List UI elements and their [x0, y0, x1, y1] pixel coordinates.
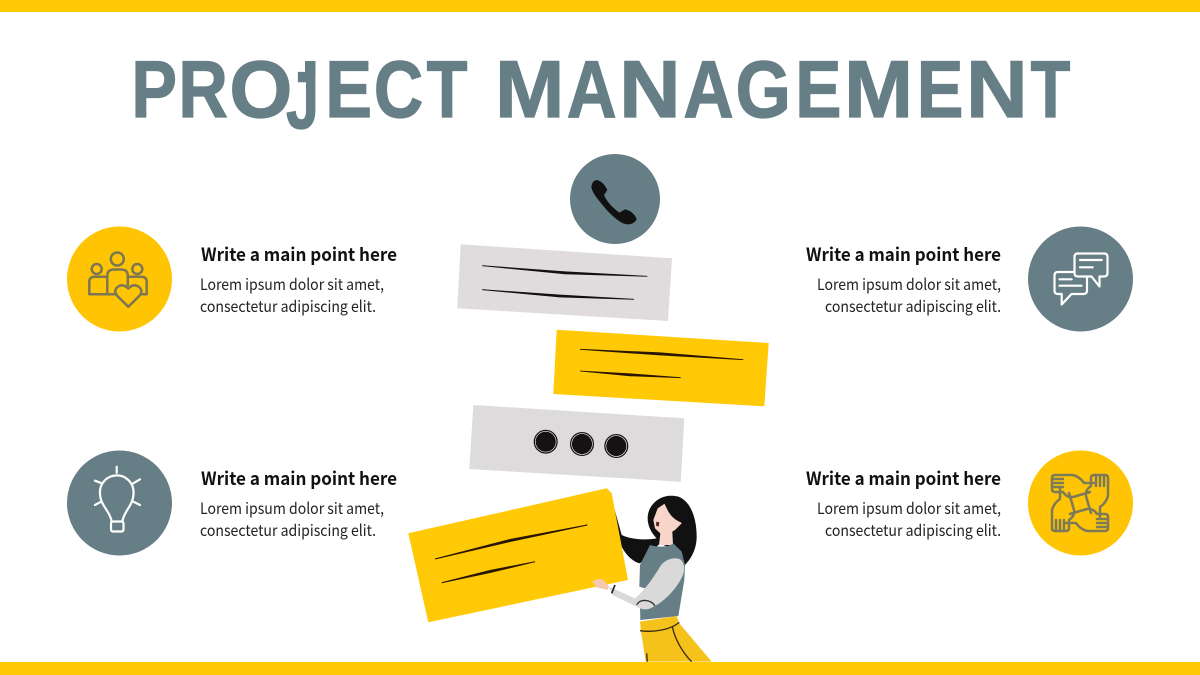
top accent bar — [0, 0, 1200, 12]
panel: top right point — [806, 226, 1133, 332]
illustration: woman holding yellow card — [408, 488, 712, 662]
woman figure — [609, 496, 712, 662]
title: J — [286, 56, 319, 146]
panel: top left point — [67, 226, 397, 332]
body text: Lorem ipsum dolor sit amet, — [200, 273, 384, 295]
body text — [817, 497, 1001, 541]
title: R — [178, 45, 228, 135]
bottom accent bar — [0, 662, 1200, 675]
card: yellow message with lines — [553, 330, 769, 406]
title: P — [131, 45, 177, 135]
title: T — [427, 45, 467, 135]
body text: consectetur adipiscing elit. — [825, 519, 1001, 541]
card: grey typing indicator — [469, 405, 684, 482]
panel: bottom left point — [67, 450, 397, 556]
icon: chat bubbles — [1028, 226, 1133, 332]
title: N — [619, 45, 681, 135]
icon: phone circle — [570, 154, 660, 244]
title: M — [495, 45, 564, 135]
title: O — [229, 45, 292, 135]
body text: Lorem ipsum dolor sit amet, — [817, 497, 1001, 519]
hand and cuff — [592, 579, 615, 593]
title: E — [917, 45, 963, 135]
title: G — [736, 45, 791, 135]
body text — [200, 273, 384, 317]
title: C — [374, 45, 423, 135]
body text: Lorem ipsum dolor sit amet, — [817, 273, 1001, 295]
title: N — [966, 45, 1028, 135]
title: A — [683, 45, 734, 135]
body text: consectetur adipiscing elit. — [825, 295, 1001, 317]
body text — [200, 497, 384, 541]
icon: light bulb — [67, 450, 172, 556]
title: M — [844, 45, 913, 135]
icon: team with heart — [67, 226, 172, 332]
title — [131, 45, 1070, 146]
heading: Write a main point here — [201, 465, 397, 491]
title: T — [1031, 45, 1070, 135]
heading: Write a main point here — [201, 241, 397, 267]
body text: consectetur adipiscing elit. — [200, 295, 376, 317]
title: A — [567, 45, 617, 135]
card lines — [435, 525, 587, 583]
heading: Write a main point here — [806, 241, 1001, 267]
title: E — [795, 45, 841, 135]
heading: Write a main point here — [806, 465, 1001, 491]
body text: consectetur adipiscing elit. — [200, 519, 376, 541]
body text: Lorem ipsum dolor sit amet, — [200, 497, 384, 519]
tilted yellow card — [408, 488, 628, 622]
panel: bottom right point — [806, 450, 1133, 556]
card: grey message with lines — [457, 244, 672, 321]
title: E — [325, 45, 372, 135]
body text — [817, 273, 1001, 317]
icon: four joined hands — [1028, 450, 1133, 556]
